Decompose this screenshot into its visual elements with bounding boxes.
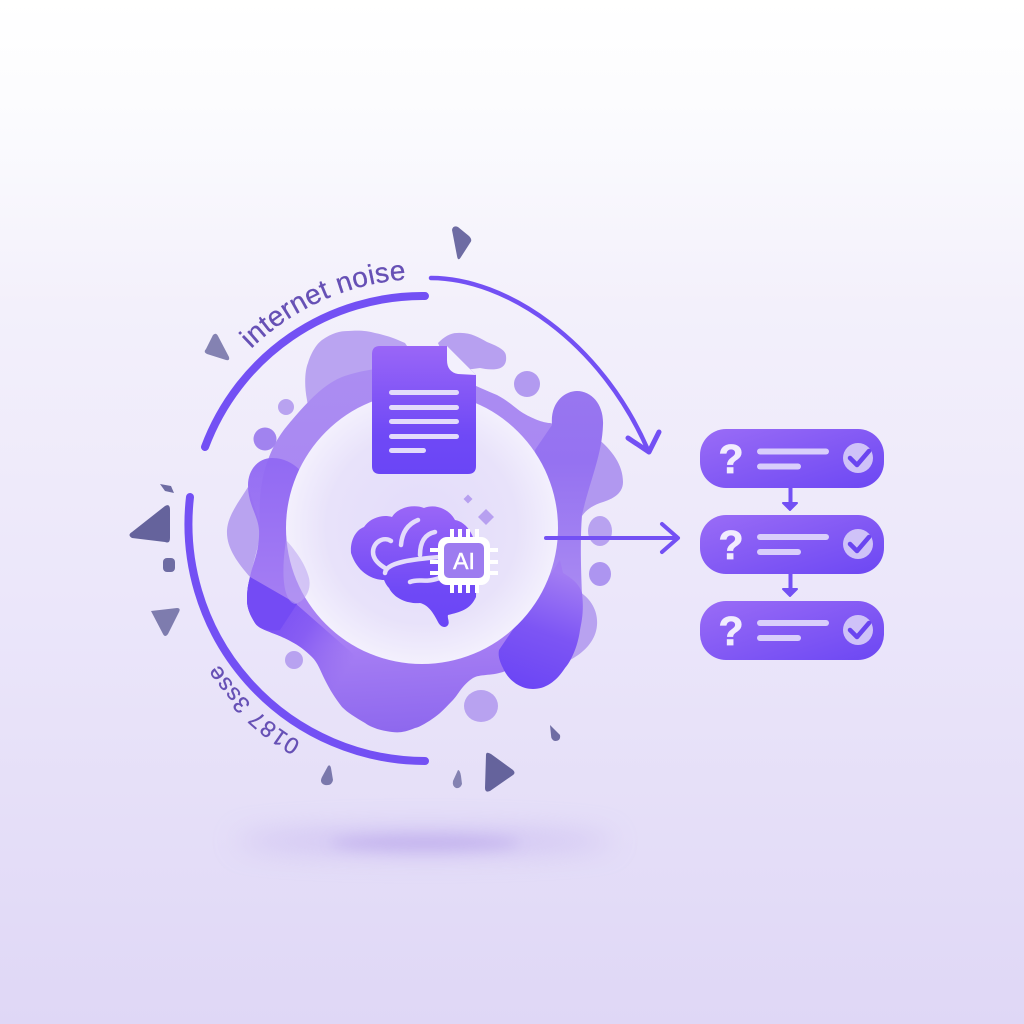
translucent left lobe over circle bbox=[283, 540, 310, 604]
panel: question card 1 bbox=[700, 429, 884, 488]
blob: left lobe bbox=[248, 458, 305, 606]
icon: AI brain bbox=[351, 506, 477, 627]
panel: question card 3 bbox=[700, 601, 884, 660]
ground shadow bbox=[235, 829, 615, 853]
panel: fluid blob cluster bbox=[227, 331, 623, 735]
blob: left light lobe bbox=[227, 487, 262, 577]
icon: AI chip bbox=[430, 529, 498, 593]
arc: outer top left bbox=[205, 296, 425, 447]
blob: upper right pill bbox=[438, 333, 506, 372]
blob: right light lobe bbox=[582, 438, 623, 516]
icon: AI chip: AI bbox=[453, 548, 475, 574]
icon: sparkles bbox=[464, 494, 494, 525]
panel: question card 2: ? bbox=[718, 522, 744, 568]
inner circle bbox=[286, 392, 558, 664]
panel: question card 2 bbox=[700, 515, 884, 574]
label: internet noise: internet noise bbox=[238, 264, 404, 348]
icon: document bbox=[372, 346, 476, 474]
arc: outer bottom left bbox=[188, 497, 425, 761]
blob: lower left shade over lobe bbox=[247, 577, 297, 631]
arrow: card 2 to 3 bbox=[783, 574, 797, 596]
panel: question card 3: ? bbox=[718, 608, 744, 654]
arrow: to question list bbox=[546, 524, 678, 552]
arrow: curved output arc bbox=[431, 278, 659, 452]
panel: question card 1: ? bbox=[718, 436, 744, 482]
blob: lower left shade bbox=[247, 577, 400, 735]
arrow: card 1 to 2 bbox=[783, 488, 797, 510]
blob: main ring bbox=[247, 367, 590, 732]
floating dots bbox=[254, 371, 612, 722]
blob: lower right dark bbox=[499, 560, 583, 689]
blob: right tall pill bbox=[535, 391, 603, 595]
noise triangles bbox=[130, 226, 560, 792]
blob: upper left light bbox=[305, 331, 430, 420]
blob: lower right light lobe bbox=[570, 592, 597, 660]
label: upside-down code: 0187 3sse bbox=[210, 666, 298, 754]
